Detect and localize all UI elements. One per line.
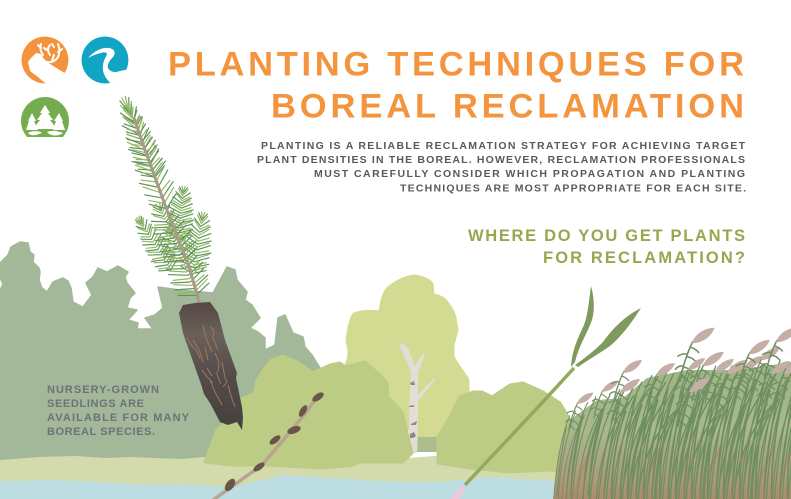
seedling xyxy=(108,91,243,430)
birch trunk xyxy=(399,344,435,453)
nursery seedlings caption: NURSERY-GROWN xyxy=(47,384,159,396)
root plug xyxy=(179,302,243,430)
grass stem and leaves xyxy=(450,286,641,499)
subheading question: WHERE DO YOU GET PLANTS xyxy=(468,227,745,245)
grass stem xyxy=(465,368,574,485)
nursery seedlings caption xyxy=(47,384,190,438)
birch tree crown xyxy=(345,276,468,440)
reed blades xyxy=(553,361,791,499)
small shrub behind birch xyxy=(417,437,437,452)
logo: heron xyxy=(82,36,130,85)
title xyxy=(168,46,744,126)
nursery seedlings caption: BOREAL SPECIES. xyxy=(47,426,155,438)
leaf upright xyxy=(571,286,594,367)
title: BOREAL RECLAMATION xyxy=(271,88,744,126)
shrub left xyxy=(205,356,412,468)
subheading question: FOR RECLAMATION? xyxy=(543,249,745,267)
roots xyxy=(187,325,235,407)
intro paragraph: TECHNIQUES ARE MOST APPROPRIATE FOR EACH SITE. xyxy=(400,182,746,194)
logo: forest xyxy=(21,97,69,137)
seedling needles xyxy=(108,91,217,302)
intro paragraph: PLANT DENSITIES IN THE BOREAL. HOWEVER, RECLAMATION PROFESSIONALS xyxy=(257,154,745,166)
seedling stem xyxy=(134,118,200,305)
reed plumes xyxy=(565,327,791,431)
reed brown accents xyxy=(576,440,791,489)
subheading question xyxy=(468,227,745,267)
willow cutting xyxy=(213,391,325,499)
intro paragraph: PLANTING IS A RELIABLE RECLAMATION STRATEGY FOR ACHIEVING TARGET xyxy=(261,140,746,152)
nursery seedlings caption: AVAILABLE FOR MANY xyxy=(47,412,190,424)
title: PLANTING TECHNIQUES FOR xyxy=(168,46,744,84)
stem pink tip xyxy=(450,486,466,499)
intro paragraph xyxy=(257,140,746,194)
reeds xyxy=(553,327,791,499)
intro paragraph: MUST CAREFULLY CONSIDER WHICH PROPAGATION AND PLANTING xyxy=(314,168,745,180)
logo: caribou xyxy=(22,36,68,84)
shrub right xyxy=(438,383,570,472)
leaf right xyxy=(575,308,641,367)
conifer forest silhouette xyxy=(0,242,330,470)
river xyxy=(0,475,600,499)
ground bank xyxy=(0,450,791,499)
nursery seedlings caption: SEEDLINGS ARE xyxy=(47,398,144,410)
reed body xyxy=(554,362,791,499)
